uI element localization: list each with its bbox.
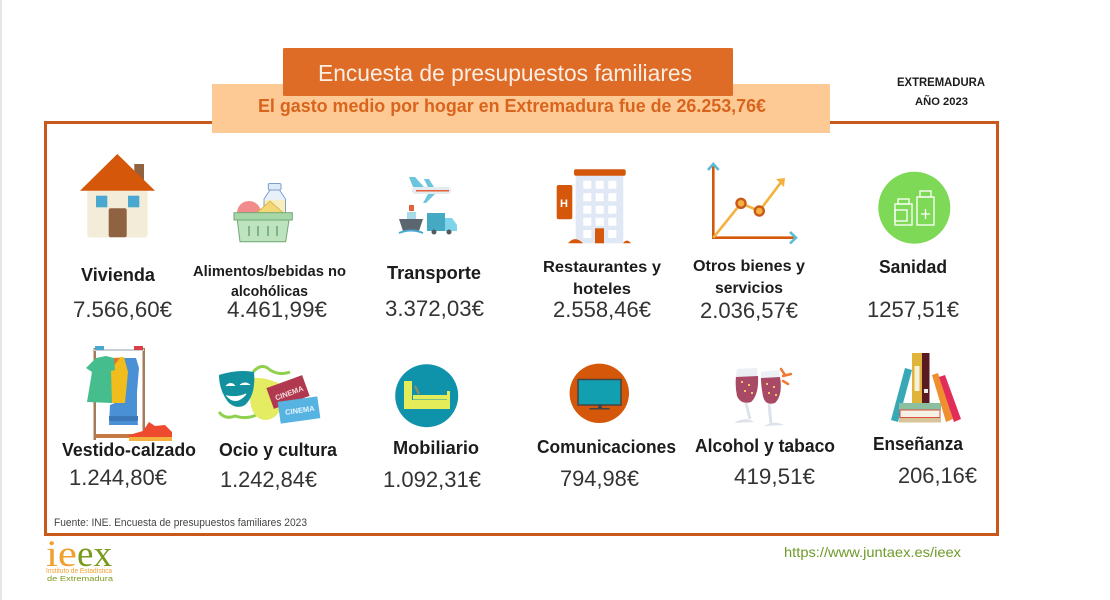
- item: Restaurantes y hoteles: [543, 169, 661, 322]
- source note: Fuente: INE. Encuesta de presupuestos familiares 2023: [54, 517, 307, 529]
- icon: medicine bottles: [878, 172, 950, 244]
- label: Mobiliario: [393, 438, 479, 458]
- label: Alcohol y tabaco: [695, 436, 835, 456]
- icon: clothes rack and shoes: [86, 346, 172, 441]
- icon: hotel: [557, 169, 631, 243]
- value: 1.092,31€: [383, 467, 481, 492]
- item: Enseñanza: [873, 353, 977, 488]
- item: Vestido-calzado: [62, 346, 196, 490]
- label: Ocio y cultura: [219, 440, 338, 460]
- value: 1257,51€: [867, 297, 959, 322]
- icon: theatre masks and cinema tickets: CINEMA: [274, 384, 305, 402]
- label: Enseñanza: [873, 434, 964, 454]
- value: 1.242,84€: [220, 467, 317, 492]
- item: Vivienda: [73, 154, 172, 322]
- item: Mobiliario: [383, 364, 481, 492]
- logo: ieex: de Extremadura: [47, 574, 114, 583]
- label: Alimentos/bebidas no: [193, 263, 346, 280]
- label: hoteles: [573, 281, 631, 298]
- logo: ieex: Instituto de Estadística: [46, 568, 112, 575]
- title banner: [283, 48, 733, 96]
- icon: television: [570, 364, 629, 423]
- item: Comunicaciones: [537, 364, 676, 491]
- logo: ieex: [46, 534, 114, 583]
- website link: https://www.juntaex.es/ieex: [784, 544, 961, 560]
- icon: theatre masks and cinema tickets: [219, 366, 320, 424]
- logo: ieex: ex: [77, 534, 112, 575]
- icon: sofa: [395, 364, 458, 427]
- label: [693, 258, 805, 297]
- icon: wine glasses toast: [734, 368, 791, 426]
- item: Sanidad: [867, 172, 959, 322]
- item: Otros bienes y servicios: [693, 164, 805, 323]
- icon: plane, ship and truck: [399, 177, 457, 234]
- value: 206,16€: [898, 463, 977, 488]
- value: 419,51€: [734, 464, 815, 489]
- value: 7.566,60€: [73, 297, 172, 322]
- icon: theatre masks and cinema tickets: CINEMA: [285, 404, 316, 417]
- label: Restaurantes y: [543, 259, 661, 276]
- region and year: EXTREMADURA: [897, 77, 985, 89]
- value: 3.372,03€: [385, 296, 484, 321]
- item: Transporte: [385, 177, 484, 321]
- subtitle banner: [212, 84, 830, 133]
- logo: ieex: ie: [46, 534, 77, 575]
- item: Alimentos: [193, 184, 346, 322]
- value: 2.036,57€: [700, 298, 798, 323]
- region and year: AÑO 2023: [915, 95, 968, 108]
- value: 2.558,46€: [553, 297, 651, 322]
- label: [543, 259, 661, 298]
- title banner: Encuesta de presupuestos familiares: [318, 60, 692, 86]
- item: Alcohol y tabaco: [695, 368, 835, 489]
- main frame: [46, 122, 998, 534]
- icon: line chart: [708, 164, 796, 244]
- icon: books: [891, 353, 961, 422]
- icon: hotel: H: [560, 198, 568, 210]
- label: Comunicaciones: [537, 437, 676, 457]
- label: Otros bienes y: [693, 258, 805, 275]
- label: servicios: [715, 280, 783, 297]
- label: Vivienda: [81, 265, 156, 285]
- label: alcohólicas: [231, 283, 308, 300]
- region and year: [897, 77, 985, 108]
- label: Sanidad: [879, 257, 947, 277]
- label: [193, 263, 346, 300]
- value: 794,98€: [560, 466, 639, 491]
- item: Ocio y cultura: [219, 366, 338, 492]
- value: 4.461,99€: [227, 297, 327, 322]
- subtitle banner: El gasto medio por hogar en Extremadura fue de 26.253,76€: [258, 96, 766, 116]
- value: 1.244,80€: [69, 465, 167, 490]
- label: Vestido-calzado: [62, 440, 196, 460]
- label: Transporte: [387, 263, 481, 283]
- icon: basket: [234, 184, 292, 242]
- icon: house: [80, 154, 155, 238]
